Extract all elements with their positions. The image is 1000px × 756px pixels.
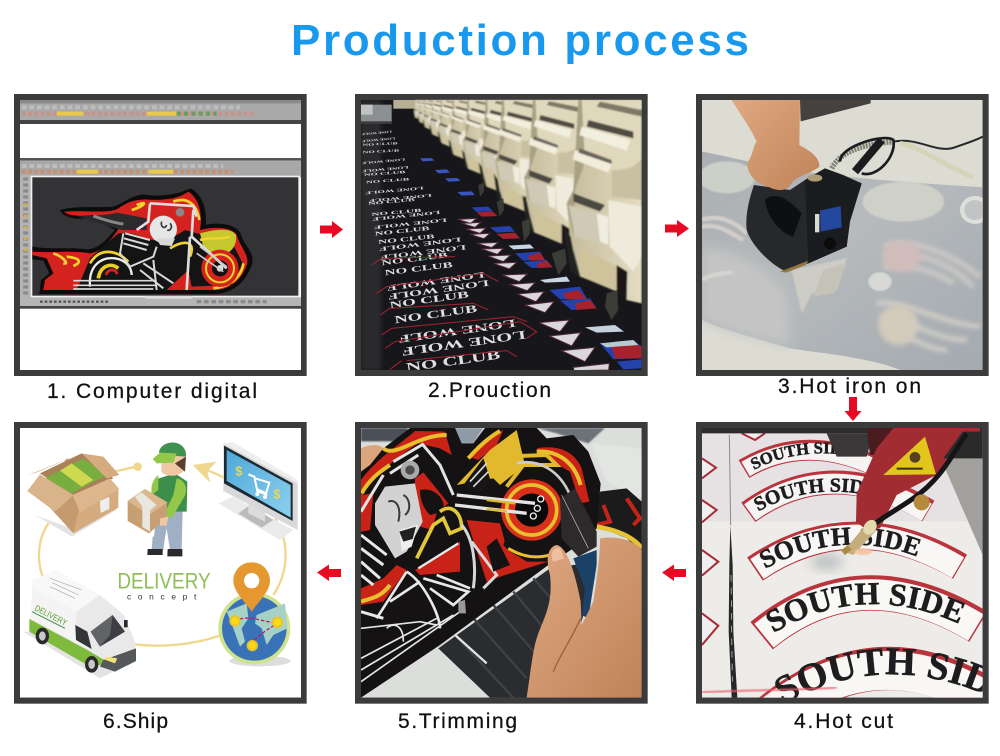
- design canvas: [31, 176, 300, 297]
- arrow: step 5 to 6: [317, 564, 341, 581]
- background window: [361, 105, 392, 124]
- status bar: [20, 296, 301, 309]
- red flames: [361, 430, 589, 605]
- upside-down and upright patch lettering: LONE WOLF: [387, 278, 489, 302]
- upside-down and upright patch lettering: NO CLUB: [364, 170, 407, 177]
- dark grey background on the right: [940, 457, 983, 555]
- side chevrons: [702, 433, 765, 645]
- left tool column: [20, 175, 32, 299]
- globe with location pin: [218, 562, 291, 666]
- red banner outlines: [372, 257, 537, 369]
- computer monitor with cart: $: [235, 465, 242, 479]
- arrow: step 3 to 4: [844, 397, 862, 421]
- upside-down and upright patch lettering: LONE WOLF: [362, 157, 405, 165]
- patch lettering SOUTH SIDE: SOUTH SIDE: [750, 442, 836, 470]
- triangle patches: [457, 218, 609, 371]
- vertical seam: [729, 435, 731, 525]
- dark ribbon rolls: [438, 555, 597, 698]
- upside-down and upright patch lettering: NO CLUB: [368, 197, 415, 206]
- software toolbar second: [20, 158, 301, 177]
- embroidered motorcycle patch: [361, 428, 601, 698]
- upside-down and upright patch lettering: LONE WOLF: [364, 186, 424, 196]
- patch lettering SOUTH SIDE: SOUTH SIDE: [754, 478, 862, 511]
- upside-down and upright patch lettering: [360, 130, 527, 375]
- scissors: [560, 488, 597, 618]
- upside-down and upright patch lettering: NO CLUB: [366, 177, 411, 184]
- patch lettering SOUTH SIDE: SOUTH SIDE: [760, 527, 921, 568]
- delivery van: [23, 570, 137, 678]
- laser line: [702, 688, 837, 692]
- caption: step 4: 4.Hot cut: [794, 710, 893, 733]
- upside-down and upright patch lettering: NO CLUB: [363, 148, 401, 154]
- upside-down and upright patch lettering: NO CLUB: [371, 209, 422, 218]
- upside-down and upright patch lettering: NO CLUB: [384, 260, 454, 277]
- upside-down and upright patch lettering: LONE WOLF: [379, 243, 466, 261]
- patch lettering SOUTH SIDE: SOUTH SIDE: [775, 648, 983, 698]
- iron: [746, 168, 862, 273]
- thumb of the left hand: [361, 445, 383, 472]
- delivery cycle ring: [39, 467, 286, 646]
- upside-down and upright patch lettering: LONE WOLF: [374, 216, 447, 229]
- caption: step 1: 1. Computer digital: [47, 380, 257, 403]
- delivery person: [128, 442, 187, 556]
- delivery van: DELIVERY: [33, 603, 69, 628]
- dark mat: [800, 100, 871, 121]
- software toolbar top: [20, 100, 301, 124]
- upside-down and upright patch lettering: NO CLUB: [378, 234, 435, 246]
- wheel: [501, 479, 562, 541]
- upside-down and upright patch lettering: LONE WOLF: [371, 209, 440, 221]
- arrow: step 1 to 2: [320, 221, 343, 238]
- caption: step 3: 3.Hot iron on: [778, 375, 921, 398]
- caption: step 5: 5.Trimming: [398, 710, 517, 733]
- title: Production process: [291, 16, 749, 65]
- open cardboard box: [27, 453, 119, 537]
- hand and arm: [732, 100, 819, 190]
- panel: delivery illustration: [14, 422, 307, 704]
- upside-down and upright patch lettering: LONE WOLF: [386, 270, 485, 293]
- upside-down and upright patch lettering: LONE WOLF: [361, 130, 392, 136]
- upside-down and upright patch lettering: LONE WOLF: [361, 136, 395, 143]
- computer monitor with cart: [218, 442, 298, 540]
- row of embroidery heads: [393, 100, 642, 303]
- printed fabric sheet: [698, 152, 990, 370]
- hand holding scissors: [527, 537, 642, 698]
- caption: step 6: 6.Ship: [103, 710, 168, 733]
- panel: hot iron on: [696, 94, 990, 376]
- delivery wordmark: DELIVERY: [117, 568, 211, 593]
- panel: production embroidery machines: [355, 94, 648, 376]
- arrow: step 2 to 3: [665, 220, 689, 237]
- laser head: [702, 428, 983, 555]
- thread spools: [478, 183, 618, 320]
- upside-down and upright patch lettering: NO CLUB: [405, 347, 502, 375]
- concept wordmark: concept: [127, 591, 197, 601]
- panel: computer digital: [14, 94, 307, 376]
- panel: trimming: [355, 422, 648, 704]
- cables: [832, 137, 983, 177]
- patch lettering SOUTH SIDE: SOUTH SIDE: [766, 582, 966, 632]
- blurred dark clothes at top: [361, 428, 642, 498]
- patch lettering SOUTH SIDE: [750, 442, 983, 698]
- arrow: step 4 to 5: [662, 564, 686, 581]
- upside-down and upright patch lettering: LONE WOLF: [378, 235, 461, 251]
- upside-down and upright patch lettering: LONE WOLF: [397, 316, 516, 345]
- arched patches: [744, 450, 990, 717]
- upside-down and upright patch lettering: NO CLUB: [363, 141, 399, 147]
- upside-down and upright patch lettering: LONE WOLF: [360, 165, 409, 173]
- flag patches: [420, 158, 642, 369]
- caption: step 2: 2.Prouction: [428, 379, 551, 402]
- upside-down and upright patch lettering: NO CLUB: [394, 304, 478, 326]
- skull: [375, 483, 423, 558]
- computer monitor with cart: $: [273, 487, 280, 501]
- upside-down and upright patch lettering: NO CLUB: [375, 226, 430, 238]
- upside-down and upright patch lettering: LONE WOLF: [367, 193, 432, 204]
- motorcycle skeleton design: [32, 188, 253, 294]
- upside-down and upright patch lettering: LONE WOLF: [401, 328, 527, 359]
- panel: hot cut laser: [696, 422, 989, 704]
- second patch behind: [595, 488, 642, 552]
- upside-down and upright patch lettering: NO CLUB: [381, 250, 448, 267]
- upside-down and upright patch lettering: NO CLUB: [389, 289, 471, 311]
